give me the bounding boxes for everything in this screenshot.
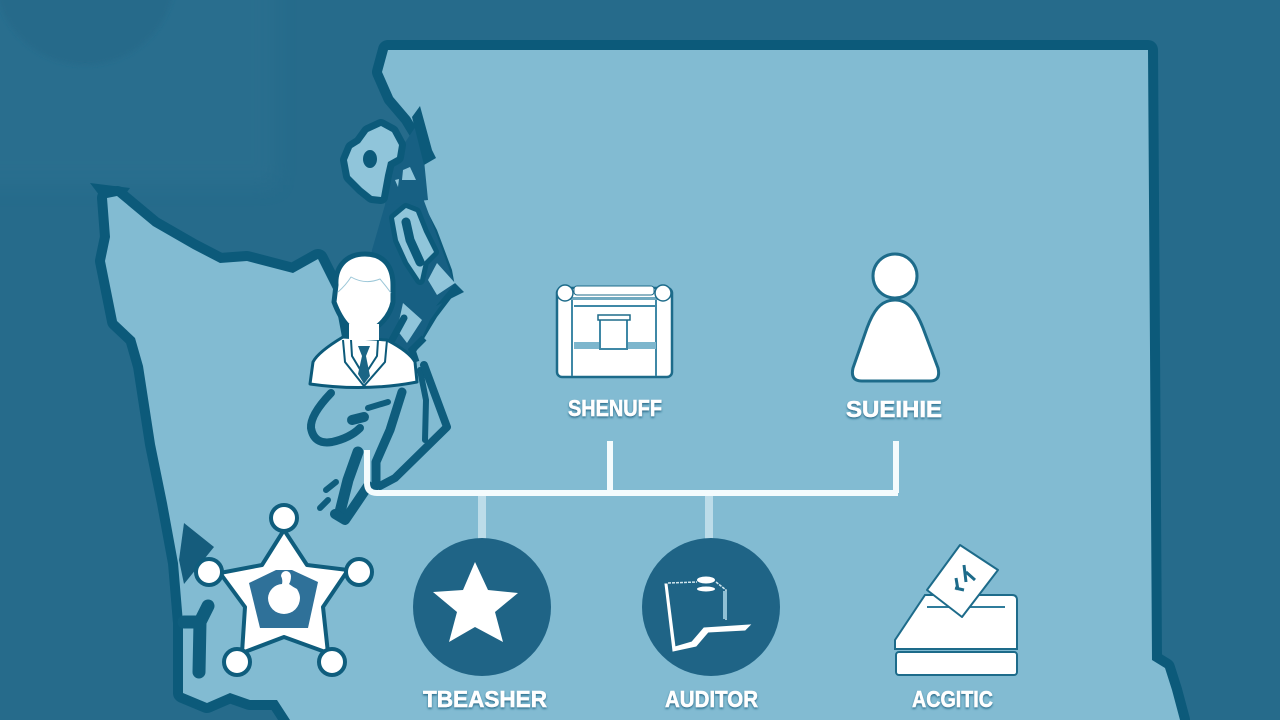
icon: treasurer star circle	[413, 538, 551, 676]
icon: generic person	[852, 254, 939, 381]
label: left upper office: SHENUFF	[568, 395, 662, 421]
map: southwest inlet	[179, 523, 214, 672]
label: right upper office: SUEIHIE	[846, 396, 942, 422]
icon: auditor clipboard circle	[642, 538, 780, 676]
icon: courthouse building	[557, 285, 672, 377]
icon: ballot box	[895, 545, 1017, 675]
map: puget sound water	[360, 106, 464, 370]
icon: sheriff star badge	[196, 505, 372, 675]
icon: official in suit	[310, 254, 417, 388]
map: state landmass	[90, 50, 1180, 720]
map: narrow island	[394, 208, 434, 280]
connector lines	[367, 441, 899, 540]
label: auditor: AUDITOR	[665, 686, 758, 712]
label: treasurer: TBEASHER	[423, 686, 547, 712]
map: southern sound strokes	[311, 365, 447, 520]
map: large island	[347, 126, 416, 197]
map: small islands	[392, 263, 455, 362]
label: right lower office: ACGITIC	[912, 686, 993, 712]
